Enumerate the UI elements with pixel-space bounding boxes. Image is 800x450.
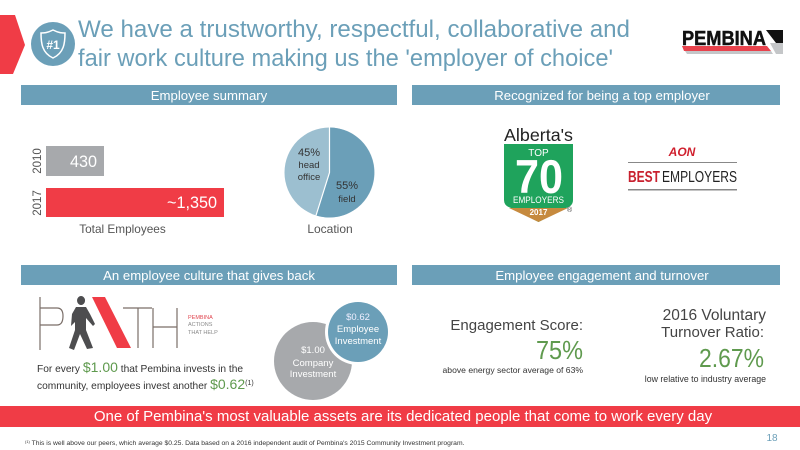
bar chart: total employees: 430	[70, 153, 97, 171]
pie chart: location: field	[338, 194, 356, 205]
Aon Best Employers logo: BEST	[628, 169, 660, 186]
Aon Best Employers logo: AON	[668, 145, 696, 159]
engagement score	[443, 317, 583, 375]
panel heading: Recognized	[412, 85, 780, 105]
turnover ratio: 2016 Voluntary	[663, 307, 766, 324]
investment circles	[274, 299, 391, 400]
investment circles: Investment	[290, 369, 337, 380]
engagement score: above energy sector average of 63%	[443, 365, 583, 375]
investment text	[37, 359, 254, 392]
PATH logo: THAT HELP	[188, 330, 218, 336]
pie chart: location: head	[298, 160, 320, 171]
engagement score: Engagement Score:	[450, 317, 583, 334]
Pembina logo: PEMBINA	[682, 28, 766, 50]
Aon Best Employers logo	[628, 145, 737, 190]
investment circles: Investment	[335, 336, 382, 347]
footnote: (1)	[25, 439, 31, 444]
icon: #1 shield badge	[31, 22, 75, 66]
PATH logo: PEMBINA	[188, 315, 213, 321]
investment text: For every $1.00 that Pembina invests in the	[37, 359, 243, 375]
investment text: (1)	[245, 380, 254, 387]
bar chart: total employees: 2010	[32, 148, 44, 174]
Alberta's Top 70 Employers badge: 2017	[530, 208, 548, 217]
pie chart: location: 55%	[336, 180, 358, 192]
title: We have a trustworthy, respectful, collaborative and	[78, 16, 630, 43]
turnover ratio	[645, 307, 766, 384]
icon: #1 shield badge: #1	[46, 38, 60, 52]
pie chart: location: 45%	[298, 147, 320, 159]
pie chart: location	[284, 128, 374, 236]
engagement score: 75%	[536, 335, 583, 365]
panel heading: culture	[21, 265, 397, 285]
Alberta's Top 70 Employers badge	[504, 125, 573, 222]
title: fair work culture making us the 'employer of choice'	[78, 45, 613, 72]
Aon Best Employers logo: EMPLOYERS	[662, 169, 737, 186]
pie chart: location: Location	[307, 222, 353, 236]
red header tab	[0, 15, 25, 74]
turnover ratio: low relative to industry average	[645, 374, 766, 384]
investment circles: Employee	[337, 324, 379, 335]
investment text: community, employees invest another $0.62	[37, 376, 245, 392]
investment circles: $0.62	[346, 312, 370, 323]
Alberta's Top 70 Employers badge: Alberta's	[504, 125, 573, 145]
PATH logo	[40, 296, 218, 350]
Alberta's Top 70 Employers badge: ®	[567, 206, 573, 214]
panel heading: Employee summary: Employee summary	[151, 88, 268, 103]
bar chart: total employees: 2017	[32, 190, 44, 216]
turnover ratio: Turnover Ratio:	[661, 324, 764, 341]
bar chart: total employees	[32, 146, 224, 236]
takeaway banner: One of Pembina's most valuable assets are its dedicated people that come to work every day	[94, 408, 713, 425]
bar chart: total employees: ~1,350	[167, 194, 217, 212]
investment circles: Company	[293, 358, 334, 369]
pie chart: location: office	[298, 172, 320, 183]
investment circles: $1.00	[301, 345, 325, 356]
footnote: This is well above our peers, which average $0.25. Data based on a 2016 independent audit of Pembina's 2015 Community Investment program.	[30, 440, 465, 447]
panel heading: engagement: Employee engagement and turnover	[495, 268, 709, 283]
panel heading: engagement	[412, 265, 780, 285]
title	[78, 16, 630, 72]
turnover ratio: 2.67%	[699, 343, 764, 373]
panel heading: culture: An employee culture that gives back	[103, 268, 315, 283]
Alberta's Top 70 Employers badge: 70	[515, 150, 563, 203]
page number: 18	[766, 433, 778, 444]
panel heading: Employee summary	[21, 85, 397, 105]
panel heading: Recognized: Recognized for being a top employer	[494, 88, 710, 103]
bar chart: total employees: Total Employees	[79, 222, 166, 236]
takeaway banner	[0, 406, 800, 427]
Alberta's Top 70 Employers badge: EMPLOYERS	[513, 195, 564, 205]
Alberta's Top 70 Employers badge: TOP	[528, 148, 549, 159]
PATH logo: ACTIONS	[188, 322, 213, 328]
